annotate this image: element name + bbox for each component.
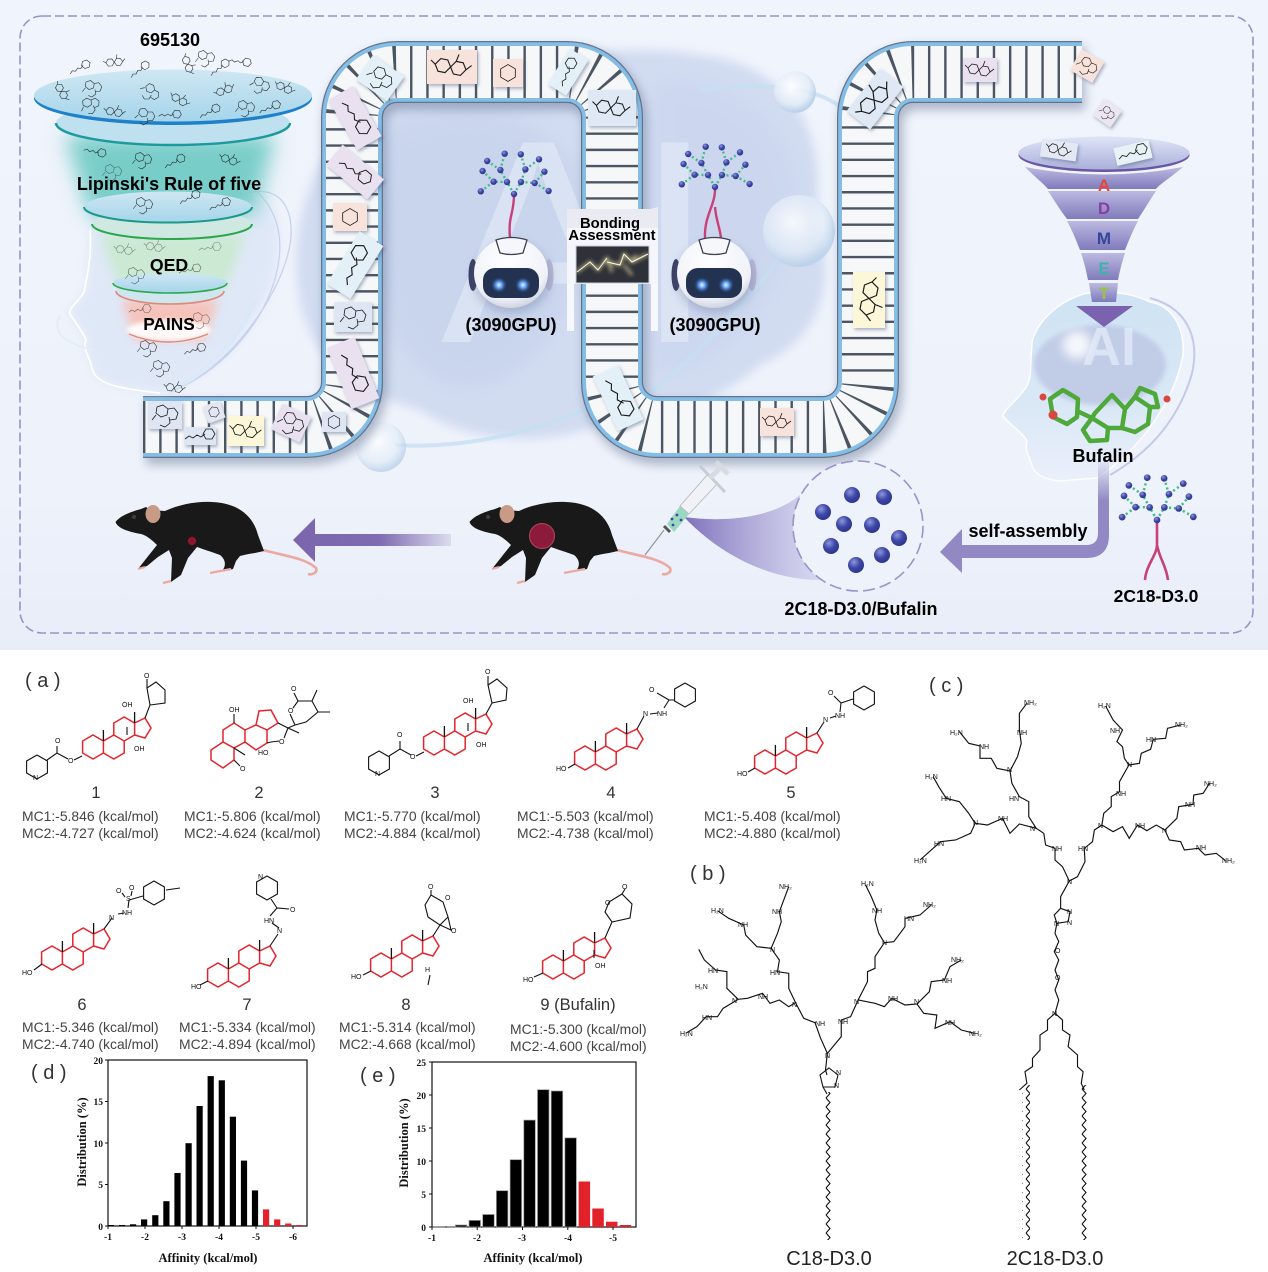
ADMET letters: [1097, 176, 1111, 303]
compound 4: MC2:-4.738 (kcal/mol): [517, 825, 654, 841]
compound 4: MC1:-5.503 (kcal/mol): [517, 808, 654, 824]
compound 3: O: [485, 669, 491, 676]
histogram d: 5: [98, 1181, 103, 1191]
histogram e: -4: [564, 1234, 572, 1244]
compound 1: OH: [134, 746, 144, 753]
structure c: 2C18-D3.0 dendrimer: NH: [1017, 730, 1027, 737]
disc: Lipinski filter: [84, 192, 252, 239]
panel label (c): ( c ): [929, 675, 963, 697]
compound 3: OH: [476, 742, 486, 749]
compound 2: OH: [229, 707, 240, 714]
compound 1: N: [33, 775, 38, 782]
compound 1: O: [55, 738, 61, 745]
structure c: 2C18-D3.0 dendrimer: HN: [934, 841, 944, 848]
compound 8: H: [425, 967, 430, 974]
histogram d: 20: [94, 1057, 103, 1067]
structure b: C18-D3.0 dendrimer: H₂N: [861, 881, 874, 888]
structure b: C18-D3.0 dendrimer: N: [792, 1002, 797, 1009]
structure c: 2C18-D3.0 dendrimer: NH: [1110, 728, 1120, 735]
structure c: 2C18-D3.0 dendrimer: N: [1067, 920, 1072, 927]
arrow into head: [1076, 306, 1133, 327]
compound 3: [344, 669, 507, 841]
structure c: 2C18-D3.0 dendrimer: NH: [1185, 802, 1195, 809]
robot 2 with dendrimer: [672, 144, 756, 313]
compound 1: 1: [91, 784, 101, 802]
compound 6: O: [116, 888, 122, 895]
compound 2: HO: [258, 750, 269, 757]
mouse with large tumour (before treatment): [470, 502, 670, 583]
disc: top layer second rim: [56, 101, 290, 145]
structure c: 2C18-D3.0 dendrimer: N: [1054, 921, 1059, 928]
robot 1 with dendrimer: [468, 150, 554, 313]
structure c: 2C18-D3.0 dendrimer: NH: [1052, 846, 1062, 853]
compound 8: O: [445, 895, 451, 902]
structure b: C18-D3.0 dendrimer: NH₂: [779, 884, 792, 891]
structure c: 2C18-D3.0 dendrimer: H₂N: [925, 774, 938, 781]
compound 3: N: [375, 771, 380, 778]
structure b: C18-D3.0 dendrimer: N: [882, 940, 887, 947]
dashed panel border: [20, 16, 1253, 633]
molecule cards on belt: [148, 48, 1122, 446]
structure b: C18-D3.0 dendrimer: N: [914, 999, 919, 1006]
structure c: 2C18-D3.0 dendrimer: N: [973, 820, 978, 827]
structure b: C18-D3.0 dendrimer: NH: [942, 978, 952, 985]
histogram d: -1: [104, 1233, 112, 1243]
compound 2: O: [240, 766, 246, 773]
compound 5: HO: [737, 771, 748, 778]
compound 7: HN: [264, 918, 274, 925]
background panel: [0, 0, 1268, 650]
compound 1: [22, 673, 165, 841]
structure c: 2C18-D3.0 dendrimer: HN: [1078, 846, 1088, 853]
structure b: C18-D3.0 dendrimer: [680, 881, 982, 1240]
compound 6: [22, 881, 180, 1052]
compound 7: HO: [191, 984, 202, 991]
compound 9 (Bufalin): [510, 884, 647, 1054]
right AI head with brain and Bufalin molecule: [1003, 292, 1194, 481]
ADMET letters: D: [1098, 199, 1110, 218]
compound 8: O: [451, 928, 457, 935]
scattered molecules in left funnel: [51, 50, 297, 392]
C18 tail: [824, 1092, 832, 1240]
compound 9 (Bufalin): HO: [523, 977, 534, 984]
structure c: 2C18-D3.0 dendrimer: N: [1098, 823, 1103, 830]
compound 5: 5: [786, 784, 796, 802]
right AI head with brain and Bufalin molecule: AI: [1082, 317, 1136, 377]
compound 4: HO: [556, 766, 567, 773]
decorative bubbles and tubes: [356, 71, 850, 472]
compound 8: 8: [401, 996, 411, 1014]
structure b: C18-D3.0 dendrimer: NH: [758, 994, 768, 1001]
panel label (b): ( b ): [690, 863, 726, 885]
compound 2: 2: [254, 784, 264, 802]
compound 9 (Bufalin): MC1:-5.300 (kcal/mol): [510, 1021, 647, 1037]
ADMET letters: T: [1099, 284, 1110, 303]
compound 7: O: [290, 907, 296, 914]
label: robot 2 GPU: (3090GPU): [669, 315, 761, 335]
structure b: C18-D3.0 dendrimer: NH: [815, 1021, 825, 1028]
compound 2: O: [291, 686, 297, 693]
structure c: 2C18-D3.0 dendrimer: N: [1052, 1011, 1057, 1018]
compound 1: O: [68, 758, 74, 765]
compound 2: [184, 686, 330, 841]
compound 9 (Bufalin): OH: [595, 963, 606, 970]
structure c: 2C18-D3.0 dendrimer: N: [1067, 879, 1072, 886]
compound 7: MC1:-5.334 (kcal/mol): [179, 1019, 316, 1035]
compound 5: NH: [835, 713, 845, 720]
histogram d: -5: [252, 1233, 260, 1243]
compound 7: N: [258, 874, 263, 881]
label: 695130: 695130: [140, 30, 200, 50]
brain background with AI letters: [297, 50, 826, 439]
left AI head outline: [57, 190, 291, 393]
compound 3: 3: [430, 784, 440, 802]
compound 2: MC1:-5.806 (kcal/mol): [184, 808, 321, 824]
label: PAINS: PAINS: [143, 314, 195, 334]
structure c: 2C18-D3.0 dendrimer: N: [1030, 826, 1035, 833]
compound 3: O: [410, 754, 416, 761]
sign: Bonding Assessment: Assessment: [568, 228, 656, 244]
structure c: 2C18-D3.0 dendrimer: NH₂: [1204, 781, 1217, 788]
compound 9 (Bufalin): O: [622, 884, 628, 891]
structure b: C18-D3.0 dendrimer: NH₂: [951, 957, 964, 964]
histogram d: -6: [289, 1233, 297, 1243]
structure c: 2C18-D3.0 dendrimer: H₂N: [950, 730, 963, 737]
structure b: C18-D3.0 dendrimer: NH: [772, 909, 782, 916]
compound 8: O: [428, 884, 434, 891]
large tumour: [530, 524, 554, 548]
structure c: 2C18-D3.0 dendrimer: NH₂: [1175, 722, 1188, 729]
compound 4: NH: [657, 711, 667, 718]
self-assembly arrow: [940, 462, 1109, 573]
structure b: C18-D3.0 dendrimer: N: [834, 1083, 839, 1090]
structure b: C18-D3.0 dendrimer: NH: [945, 1020, 955, 1027]
compound 5: N: [823, 717, 828, 724]
compound 4: N: [643, 711, 648, 718]
2C18-D3.0 dendrimer icon: [1119, 474, 1197, 580]
compound 6: 6: [77, 996, 87, 1014]
compound 3: MC2:-4.884 (kcal/mol): [344, 825, 481, 841]
compound 2: MC2:-4.624 (kcal/mol): [184, 825, 321, 841]
compound 1: MC1:-5.846 (kcal/mol): [22, 808, 159, 824]
Bufalin 3D molecule: [1050, 388, 1158, 441]
structure c: 2C18-D3.0 dendrimer: HN: [1009, 796, 1019, 803]
compound 1: O: [144, 673, 150, 680]
docking image: [576, 246, 649, 283]
structure c: 2C18-D3.0 dendrimer: H₂N: [914, 858, 927, 865]
histogram e: 5: [421, 1191, 426, 1201]
panel label (a): ( a ): [25, 670, 61, 692]
histogram e: [397, 1059, 636, 1265]
nanoparticle circle: [684, 461, 923, 591]
compound 6: NH: [122, 910, 132, 917]
compound 5: MC2:-4.880 (kcal/mol): [704, 825, 841, 841]
compound 5: O: [828, 690, 834, 697]
compound 8: [339, 884, 476, 1052]
histogram e: 15: [416, 1125, 426, 1135]
compound 3: MC1:-5.770 (kcal/mol): [344, 808, 481, 824]
structure b: C18-D3.0 dendrimer: H₂N: [711, 908, 724, 915]
histogram d: Affinity (kcal/mol): [159, 1251, 257, 1265]
structure c: 2C18-D3.0 dendrimer: NH: [1116, 791, 1126, 798]
label: 2C18-D3.0/Bufalin: 2C18-D3.0/Bufalin: [784, 599, 938, 619]
structure c: 2C18-D3.0 dendrimer: N: [1127, 762, 1132, 769]
structure b: C18-D3.0 dendrimer: H₂N: [680, 1031, 693, 1038]
small tumour: [188, 537, 196, 545]
sign: Bonding Assessment: [567, 207, 658, 331]
funnel bands: [1025, 167, 1183, 302]
compound 6: MC2:-4.740 (kcal/mol): [22, 1036, 159, 1052]
compound 6: HO: [22, 970, 33, 977]
compound 3: O: [397, 732, 403, 739]
label: self-assembly: self-assembly: [968, 521, 1088, 541]
histogram e: 10: [416, 1158, 426, 1168]
compound 3: OH: [463, 698, 474, 705]
structure b: C18-D3.0 dendrimer: NH₂: [923, 902, 936, 909]
ADMET letters: E: [1098, 259, 1110, 278]
histogram e: 20: [416, 1092, 426, 1102]
compound 2: O: [288, 708, 294, 715]
histogram d: 10: [94, 1140, 103, 1150]
compound 6: S: [126, 896, 131, 903]
panel label (e): ( e ): [360, 1065, 396, 1087]
mouse with small tumour (treated): [116, 502, 316, 583]
compound 8: HO: [351, 974, 362, 981]
label: C18-D3.0: C18-D3.0: [786, 1248, 872, 1270]
histogram e: -2: [473, 1234, 481, 1244]
ADMET letters: M: [1097, 229, 1111, 248]
histogram d: -4: [215, 1233, 223, 1243]
histogram d: Distribution (%): [75, 1097, 89, 1187]
structure c: 2C18-D3.0 dendrimer: NH₂: [1024, 700, 1037, 707]
structure c: 2C18-D3.0 dendrimer: O: [1055, 975, 1061, 982]
structure c: 2C18-D3.0 dendrimer: N: [1162, 828, 1167, 835]
compound 6: O: [129, 885, 135, 892]
2C18 tails: [1022, 1085, 1087, 1240]
histogram e: -1: [428, 1234, 436, 1244]
structure b: C18-D3.0 dendrimer: NH: [872, 908, 882, 915]
structure b: C18-D3.0 dendrimer: HN: [702, 1015, 712, 1022]
histogram e: 0: [421, 1224, 426, 1234]
structure b: C18-D3.0 dendrimer: H₂N: [695, 984, 708, 991]
histogram d: [75, 1057, 307, 1265]
histogram e: 25: [416, 1059, 426, 1069]
compound 9 (Bufalin): 9 (Bufalin): [540, 996, 616, 1014]
histogram e: Affinity (kcal/mol): [484, 1251, 582, 1265]
compound 7: N: [277, 928, 282, 935]
label: robot 1 GPU: (3090GPU): [465, 315, 557, 335]
compound 9 (Bufalin): MC2:-4.600 (kcal/mol): [510, 1038, 647, 1054]
compound 9 (Bufalin): O: [605, 900, 611, 907]
brain background with AI letters: AI: [441, 80, 715, 404]
structure b: C18-D3.0 dendrimer: N: [836, 1070, 841, 1077]
structure b: C18-D3.0 dendrimer: N: [732, 998, 737, 1005]
label: 2C18-D3.0 structure: 2C18-D3.0: [1007, 1248, 1103, 1270]
disc: 695130 library: [34, 71, 312, 125]
structure c: 2C18-D3.0 dendrimer: H₂N: [1098, 703, 1111, 710]
structure b: C18-D3.0 dendrimer: N: [825, 1053, 830, 1060]
structure b: C18-D3.0 dendrimer: N: [770, 947, 775, 954]
arrow between mice: [293, 518, 451, 562]
label: QED: QED: [150, 255, 188, 275]
label: Lipinski's Rule of five: Lipinski's Rule of five: [77, 174, 261, 194]
structure c: 2C18-D3.0 dendrimer: NH: [1135, 823, 1145, 830]
structure c: 2C18-D3.0 dendrimer: NH: [998, 816, 1008, 823]
label: 2C18-D3.0: 2C18-D3.0: [1114, 586, 1199, 606]
structure b: C18-D3.0 dendrimer: N: [854, 999, 859, 1006]
structure c: 2C18-D3.0 dendrimer: HN: [1146, 737, 1156, 744]
disc: PAINS filter: [129, 334, 208, 342]
structure c: 2C18-D3.0 dendrimer: NH: [1196, 845, 1206, 852]
histogram d: -3: [178, 1233, 186, 1243]
structure c: 2C18-D3.0 dendrimer: N: [1007, 767, 1012, 774]
structure c: 2C18-D3.0 dendrimer: NH₂: [1222, 858, 1235, 865]
compound 7: 7: [242, 996, 252, 1014]
conveyor belt: [143, 72, 1085, 433]
compound 4: [517, 683, 695, 841]
histogram e: -5: [609, 1234, 617, 1244]
compound 7: [179, 874, 316, 1052]
structure b: C18-D3.0 dendrimer: HN: [904, 916, 914, 923]
structure b: C18-D3.0 dendrimer: NH₂: [969, 1031, 982, 1038]
structure b: C18-D3.0 dendrimer: NH: [888, 996, 898, 1003]
compound 4: O: [649, 687, 655, 694]
compound 1: OH: [122, 702, 132, 709]
compound 1: MC2:-4.727 (kcal/mol): [22, 825, 159, 841]
structure c: 2C18-D3.0 dendrimer: NH: [979, 744, 989, 751]
compound 7: MC2:-4.894 (kcal/mol): [179, 1036, 316, 1052]
structure c: 2C18-D3.0 dendrimer: N: [1067, 909, 1072, 916]
compound 5: [704, 686, 874, 841]
structure b: C18-D3.0 dendrimer: HN: [770, 970, 780, 977]
ADMET funnel: [1018, 136, 1190, 303]
filter funnel: [34, 70, 312, 342]
structure c: 2C18-D3.0 dendrimer: [914, 700, 1235, 1240]
label: Bufalin: Bufalin: [1072, 446, 1134, 466]
structure b: C18-D3.0 dendrimer: NH: [738, 922, 748, 929]
histogram e: Distribution (%): [397, 1098, 411, 1188]
ADMET letters: A: [1098, 176, 1110, 195]
compound 5: MC1:-5.408 (kcal/mol): [704, 808, 841, 824]
syringe: [645, 462, 728, 555]
structure c: 2C18-D3.0 dendrimer: HN: [941, 796, 951, 803]
compound 6: MC1:-5.346 (kcal/mol): [22, 1019, 159, 1035]
histogram d: -2: [141, 1233, 149, 1243]
funnel top with molecule cards: [1018, 136, 1190, 172]
compound 8: MC2:-4.668 (kcal/mol): [339, 1036, 476, 1052]
compound 8: MC1:-5.314 (kcal/mol): [339, 1019, 476, 1035]
disc: QED filter: [113, 273, 227, 304]
histogram d: 15: [94, 1098, 103, 1108]
sign: Bonding Assessment: Bonding: [580, 216, 640, 232]
histogram e: -3: [518, 1234, 526, 1244]
compound 2: O: [279, 739, 285, 746]
panel label (d): ( d ): [31, 1062, 67, 1084]
structure b: C18-D3.0 dendrimer: NH: [838, 1019, 848, 1026]
histogram d: 0: [98, 1223, 103, 1233]
structure c: 2C18-D3.0 dendrimer: O: [1055, 948, 1061, 955]
structure b: C18-D3.0 dendrimer: HN: [708, 968, 718, 975]
compound 6: N: [109, 915, 114, 922]
compound 4: 4: [606, 784, 616, 802]
